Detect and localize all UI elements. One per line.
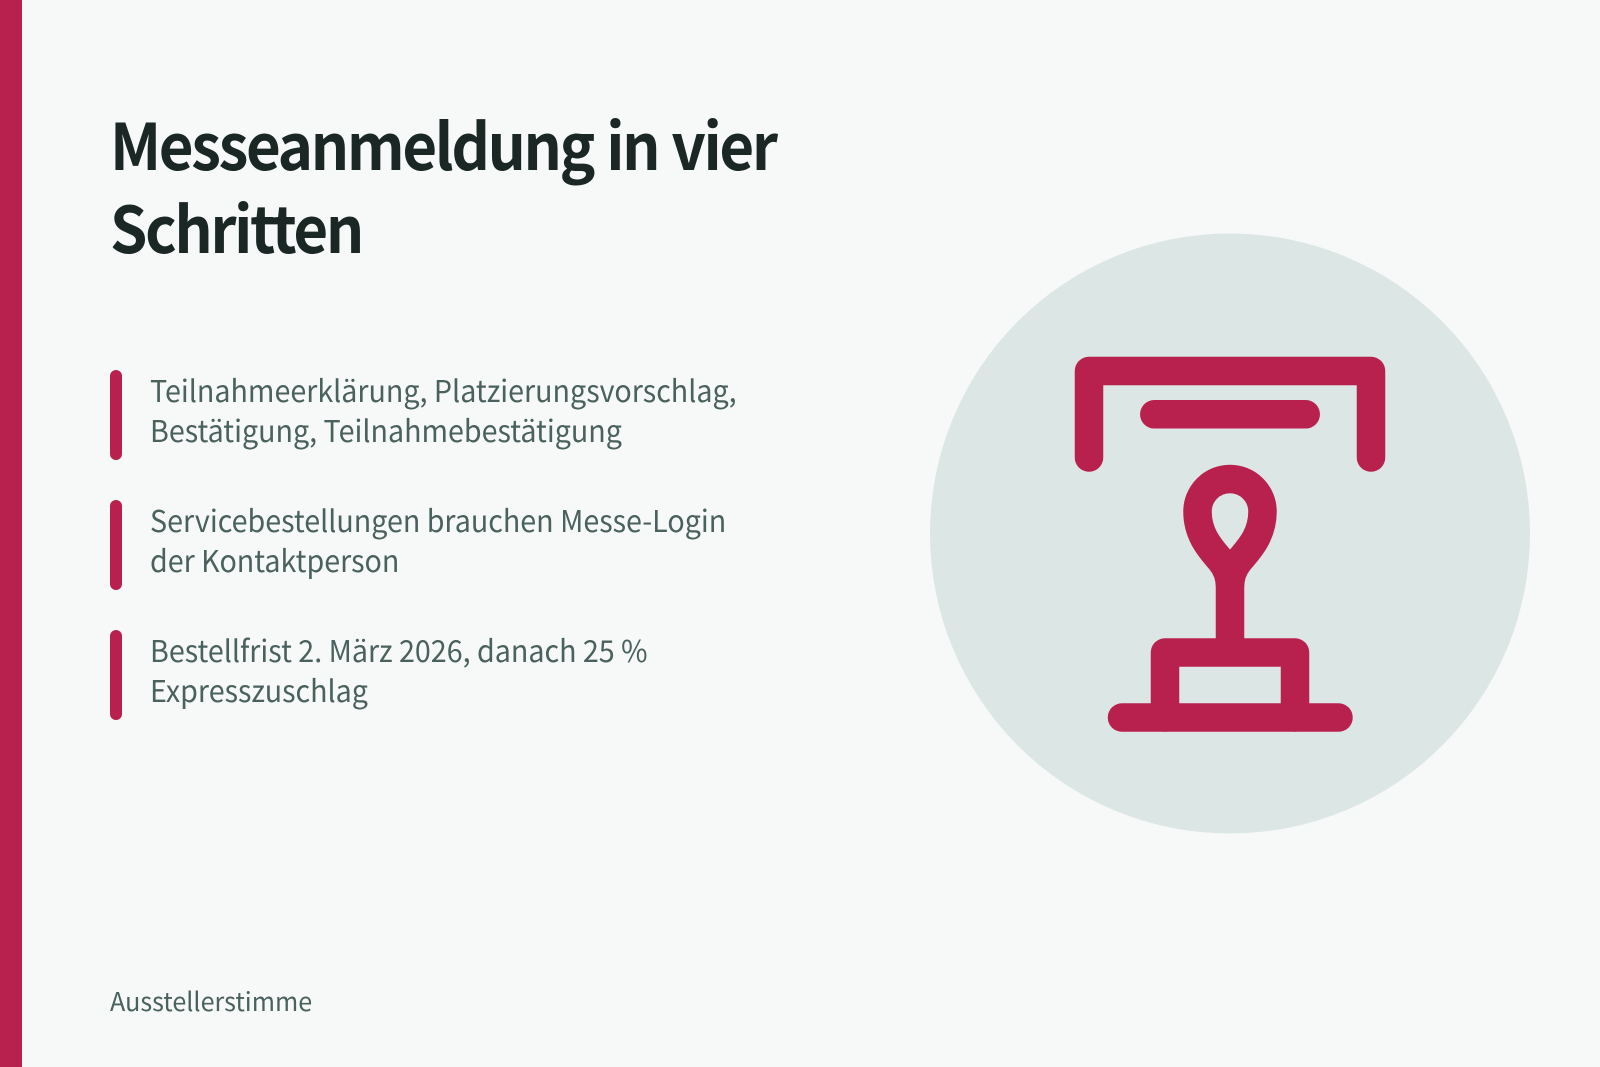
- item text: Servicebestellungen brauchen Messe-Login: [150, 497, 726, 541]
- item text: Bestellfrist 2. März 2026, danach 25 %: [150, 627, 648, 671]
- item text: [150, 497, 726, 581]
- marker bar: [110, 370, 122, 460]
- item text: [150, 367, 737, 451]
- icon: stamp: [1089, 371, 1371, 718]
- item text: [150, 627, 648, 711]
- list item: documents: [110, 367, 737, 460]
- title: Messeanmeldung in vier: [110, 97, 776, 189]
- item text: der Kontaktperson: [150, 537, 399, 581]
- item text: Teilnahmeerklärung, Platzierungsvorschlag,: [150, 367, 737, 411]
- accent stripe: [0, 0, 22, 1067]
- item text: Expresszuschlag: [150, 667, 368, 711]
- list item: deadline: [110, 627, 648, 720]
- list item: service orders: [110, 497, 726, 590]
- marker bar: [110, 500, 122, 590]
- marker bar: [110, 630, 122, 720]
- background circle: [930, 234, 1530, 834]
- title: [110, 97, 778, 272]
- footer label: Ausstellerstimme: [110, 982, 312, 1019]
- item text: Bestätigung, Teilnahmebestätigung: [150, 407, 622, 451]
- title: Schritten: [110, 180, 362, 272]
